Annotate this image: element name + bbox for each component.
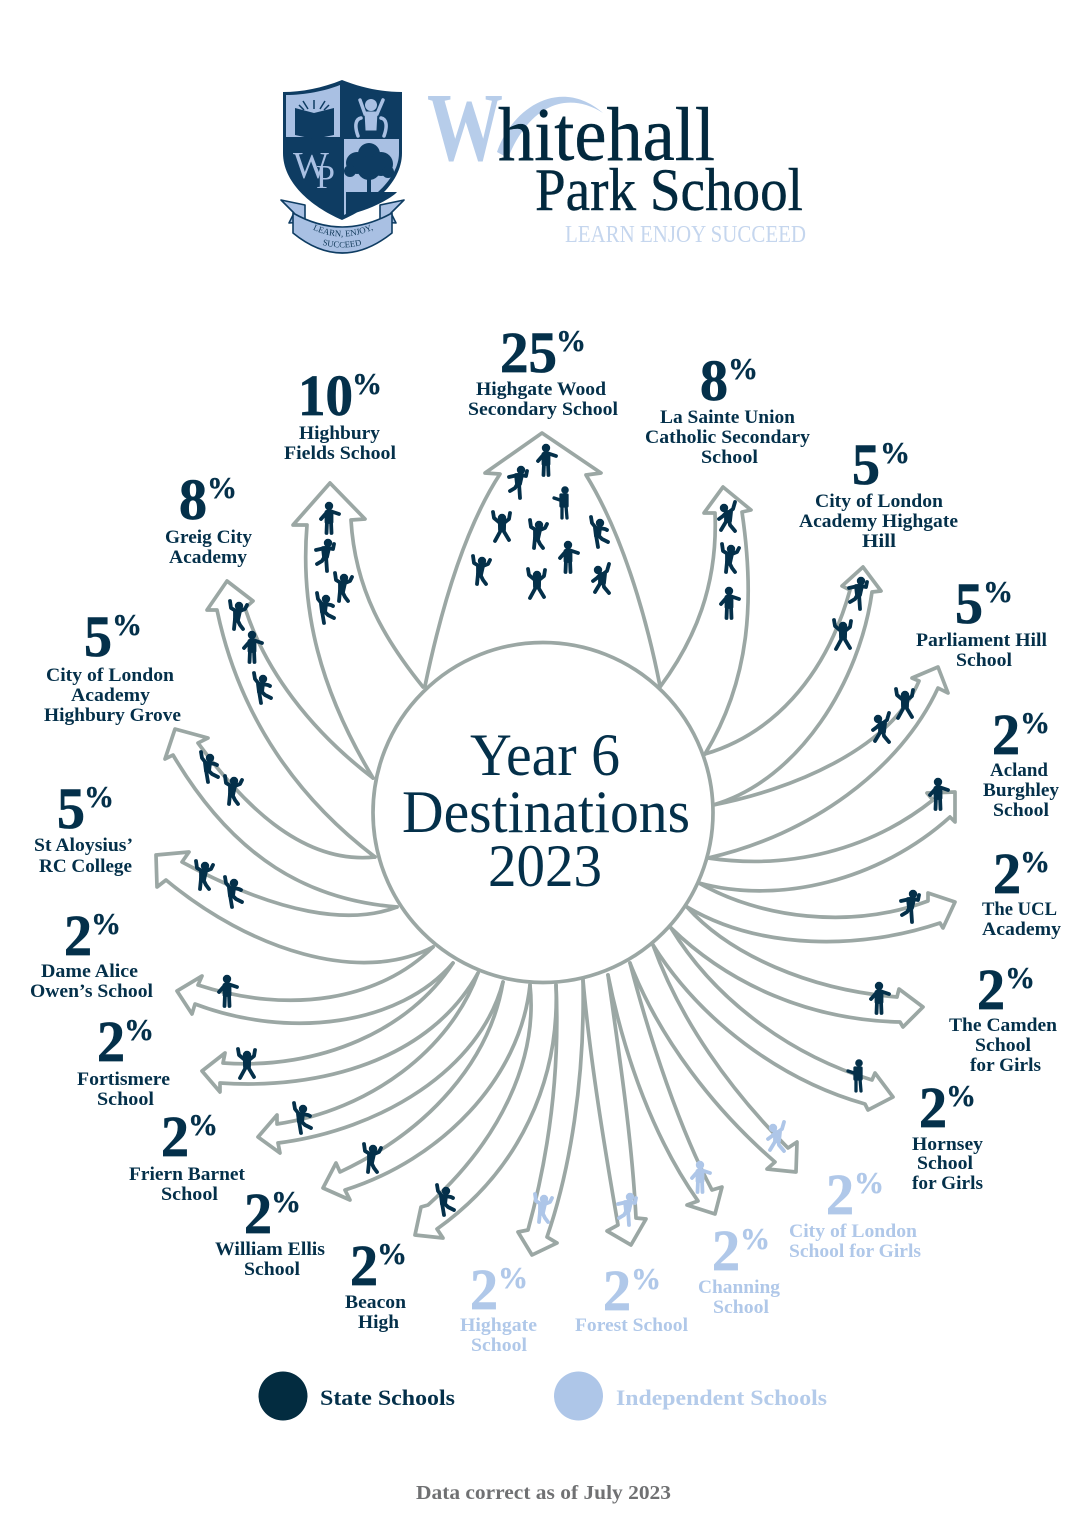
label: 2% Channing: Channing [698,1277,780,1298]
label: 8% Greig City: Academy [169,547,248,568]
label: 2% Acland Burghley: Burghley [983,780,1060,801]
arrow: St Aloysius [156,852,433,963]
label: 2% Fortismere: School [97,1089,154,1110]
label: 2% Highgate School [460,1257,537,1356]
label: 8% Greig City: % [207,470,237,505]
crest motto: LEARN, ENJOY, [312,224,373,238]
label: 10% Highbury Fields [284,363,396,464]
label: 2% Hornsey: 2 [919,1075,947,1140]
label: 2% Highgate School: School [471,1335,527,1356]
legend: state schools [258,1372,455,1420]
crest motto: SUCCEED [322,240,361,248]
label: 2% Camden School for Girls: for Girls [970,1055,1041,1076]
crest ribbon [281,200,404,253]
label: 2% Hornsey: Hornsey [912,1134,984,1155]
arrow: City of London School for Girls [630,945,797,1172]
label: 2% Fortismere: 2 [97,1009,125,1074]
label: 2% William Ellis [215,1181,325,1280]
label: 5% City of London Academy Highbury Grove: % [112,607,142,642]
label: 2% UCL Academy [982,841,1062,940]
label: 5% City of London Academy Highbury Grove: 5 [84,604,112,669]
arrow: City of London Academy Highbury Grove [165,729,397,907]
figure [848,1059,863,1091]
icon: open book [295,100,334,139]
label: 8% Greig City: Greig City [165,527,252,548]
label: 2% Camden School for Girls [949,957,1057,1076]
label: 2% Hornsey: % [946,1078,976,1113]
label: 5% City of London Academy Highbury Grove [44,604,181,726]
crest monogram WP: W [293,145,329,187]
figures [230,601,271,703]
label: 2% Friern Barnet: Friern Barnet [129,1164,246,1185]
figures [473,444,609,598]
label: 2% Camden School for Girls: % [1005,960,1035,995]
label: 8% La Sainte Union: La Sainte Union [660,407,795,428]
figure [294,1103,311,1133]
label: 2% Friern Barnet [129,1104,246,1205]
label: 2% Channing: 2 [712,1218,740,1283]
label: 2% Forest School: % [631,1261,661,1296]
label: 25% Highgate Wood: Secondary School [468,399,618,420]
label: 2% Friern Barnet: 2 [161,1104,189,1169]
arrow: Highbury Fields [293,483,423,778]
label: 2% Acland Burghley: 2 [992,702,1020,767]
arrow: Channing [608,963,722,1214]
crest monogram WP: P [316,159,335,196]
label: 2% Fortismere: % [124,1012,154,1047]
wordmark hitehall: hitehall [498,93,715,177]
label: 2% Highgate School: % [498,1260,528,1295]
label: 2% Camden School for Girls: The Camden [949,1015,1057,1036]
wordmark Park School: Park School [535,157,803,223]
label: 2% City of London School for Girls: School for Girls [789,1241,921,1262]
label: 2% Dame Alice Owen's [30,903,153,1002]
label: 5% St Aloysius: St Aloysius’ [34,835,133,856]
label: 2% Beacon High: 2 [350,1233,378,1298]
label: 25% Highgate Wood [468,320,618,420]
label: 2% UCL Academy: % [1020,844,1050,879]
label: 5% City of London Academy Highgate Hill: Academy Highgate [799,511,958,532]
label: 2% Dame Alice Owen's: Owen’s School [30,981,153,1002]
label: 2% Beacon High: % [377,1236,407,1271]
figures [196,861,242,907]
icon: raised-arm figures [356,99,386,136]
figure [437,1185,454,1215]
label: 2% Dame Alice Owen's: 2 [64,903,92,968]
label: 5% City of London Academy Highgate Hill: Hill [862,531,896,552]
label: 5% St Aloysius: RC College [39,856,132,877]
label: 2% Beacon High [345,1233,407,1333]
wordmark swoosh [497,97,603,158]
label: 10% Highbury Fields: Fields School [284,443,396,464]
bottom-right quarter [344,139,399,215]
label: 2% Camden School for Girls: 2 [977,957,1005,1022]
label: 2% Channing: % [740,1221,770,1256]
arrow: Dame Alice Owen's [177,947,453,1023]
title: Destinations [402,779,690,845]
title: 2023 [488,833,602,899]
label: 5% Parliament Hill: 5 [955,571,983,636]
label: 2% Forest School: Forest School [575,1315,688,1336]
label: 2% Highgate School: Highgate [460,1315,537,1336]
label: 10% Highbury Fields: % [352,366,382,401]
arrow: William Ellis [323,982,530,1200]
label: 8% La Sainte Union: Catholic Secondary [645,427,811,448]
label: 2% William Ellis: School [244,1259,300,1280]
label: 8% La Sainte Union: 8 [700,348,728,413]
figure [364,1144,381,1172]
label: 5% Parliament Hill: % [983,574,1013,609]
label: 2% Friern Barnet: % [188,1107,218,1142]
legend: state schools: State Schools [320,1385,455,1410]
arrow: Beacon High [415,985,556,1238]
arrow: Highgate School [518,980,583,1255]
label: 8% La Sainte Union: School [701,447,758,468]
top-left quarter [286,85,340,137]
arrow: Fortismere [202,963,478,1092]
figure [768,1122,784,1151]
label: 2% Channing: School [713,1297,769,1318]
label: 2% Hornsey: for Girls [912,1173,983,1194]
label: 2% Beacon High: Beacon [345,1292,406,1313]
label: 10% Highbury Fields: Highbury [299,423,380,444]
label: 2% Forest School [575,1258,688,1336]
figures [834,577,867,649]
figure [930,778,948,809]
arrow: Friern Barnet [258,973,503,1153]
figure [219,975,237,1006]
label: 5% City of London Academy Highbury Grove: Highbury Grove [44,705,181,726]
label: 2% Hornsey: School [917,1153,973,1174]
arrow: Acland Burghley [699,778,955,891]
label: 8% La Sainte Union [645,348,811,468]
footer note: Data correct as of July 2023 [416,1482,671,1504]
label: 5% City of London Academy Highgate Hill: % [880,435,910,470]
label: 2% City of London School for Girls: % [854,1165,884,1200]
label: 2% William Ellis: 2 [244,1181,272,1246]
label: 2% William Ellis: % [271,1184,301,1219]
label: 8% Greig City [165,467,252,568]
label: 2% UCL Academy: 2 [993,841,1021,906]
figure [871,982,889,1013]
label: 5% Parliament Hill: Parliament Hill [916,630,1047,651]
label: 5% City of London Academy Highbury Grove: Academy [71,685,151,706]
figure [535,1194,552,1222]
label: 5% St Aloysius: 5 [57,776,85,841]
label: 5% City of London Academy Highgate Hill: City of London [815,491,943,512]
arrow: Greig City [207,581,375,857]
icon: oak tree [344,143,397,214]
centre circle [373,642,713,982]
figures [873,689,913,742]
school wordmark [427,74,806,248]
wordmark W: W [427,74,503,182]
label: 2% Camden School for Girls: School [975,1035,1031,1056]
label: 2% William Ellis: William Ellis [215,1239,325,1260]
title [402,722,690,899]
label: 5% Parliament Hill [916,571,1047,671]
label: 2% City of London School for Girls [789,1162,921,1262]
label: 10% Highbury Fields: 10 [298,363,353,428]
arrow: Highgate Wood [425,433,660,686]
figures [316,502,352,623]
arrow: Hornsey [653,928,893,1110]
label: 2% City of London School for Girls: City of London [789,1221,917,1242]
title: Year 6 [470,722,620,788]
label: 2% Forest School: 2 [603,1258,631,1323]
label: 2% Acland Burghley: School [993,800,1049,821]
legend: independent schools: Independent Schools [616,1385,827,1410]
label: 2% Channing [698,1218,780,1318]
label: 2% Highgate School: 2 [470,1257,498,1322]
label: 2% Fortismere [77,1009,170,1110]
label: 2% Friern Barnet: School [161,1184,218,1205]
label: 5% St Aloysius: % [84,779,114,814]
arrow: La Sainte Union [660,487,751,754]
school crest [280,80,405,254]
legend: independent schools [554,1372,827,1420]
label: 25% Highgate Wood: 25 [500,320,557,385]
label: 5% Parliament Hill: School [956,650,1012,671]
label: 5% City of London Academy Highgate Hill [799,432,958,552]
crest motto [312,224,373,248]
figures [719,502,739,618]
label: 2% Dame Alice Owen's: Dame Alice [41,961,138,982]
label: 2% City of London School for Girls: 2 [826,1162,854,1227]
label: 5% St Aloysius [34,776,133,877]
label: 2% Acland Burghley [983,702,1060,821]
label: 2% Fortismere: Fortismere [77,1069,170,1090]
arrow: Forest School [583,975,646,1245]
arrow: Camden School for Girls [671,907,923,1027]
figure [901,890,919,922]
label: 8% La Sainte Union: % [728,351,758,386]
label: 25% Highgate Wood: % [556,323,586,358]
label: 2% Acland Burghley: Acland [990,760,1048,781]
label: 2% UCL Academy: The UCL [982,899,1057,920]
figures [201,752,242,804]
wordmark strapline: LEARN ENJOY SUCCEED [565,222,806,248]
label: 2% UCL Academy: Academy [982,919,1062,940]
label: 2% Hornsey [912,1075,984,1194]
figure [692,1161,710,1192]
crest shield [283,80,402,220]
label: 5% City of London Academy Highgate Hill: 5 [852,432,880,497]
label: 25% Highgate Wood: Highgate Wood [476,379,606,400]
label: 2% Beacon High: High [358,1312,399,1333]
figure [238,1049,255,1078]
label: 2% Acland Burghley: % [1020,705,1050,740]
label: 8% Greig City: 8 [179,467,207,532]
label: 5% City of London Academy Highbury Grove: City of London [46,665,174,686]
label: 2% Dame Alice Owen's: % [91,906,121,941]
arrow: Parliament Hill [708,667,948,858]
arrow: UCL Academy [687,883,955,942]
arrow: City of London Academy Highgate Hill [705,567,881,805]
figure [618,1193,636,1225]
